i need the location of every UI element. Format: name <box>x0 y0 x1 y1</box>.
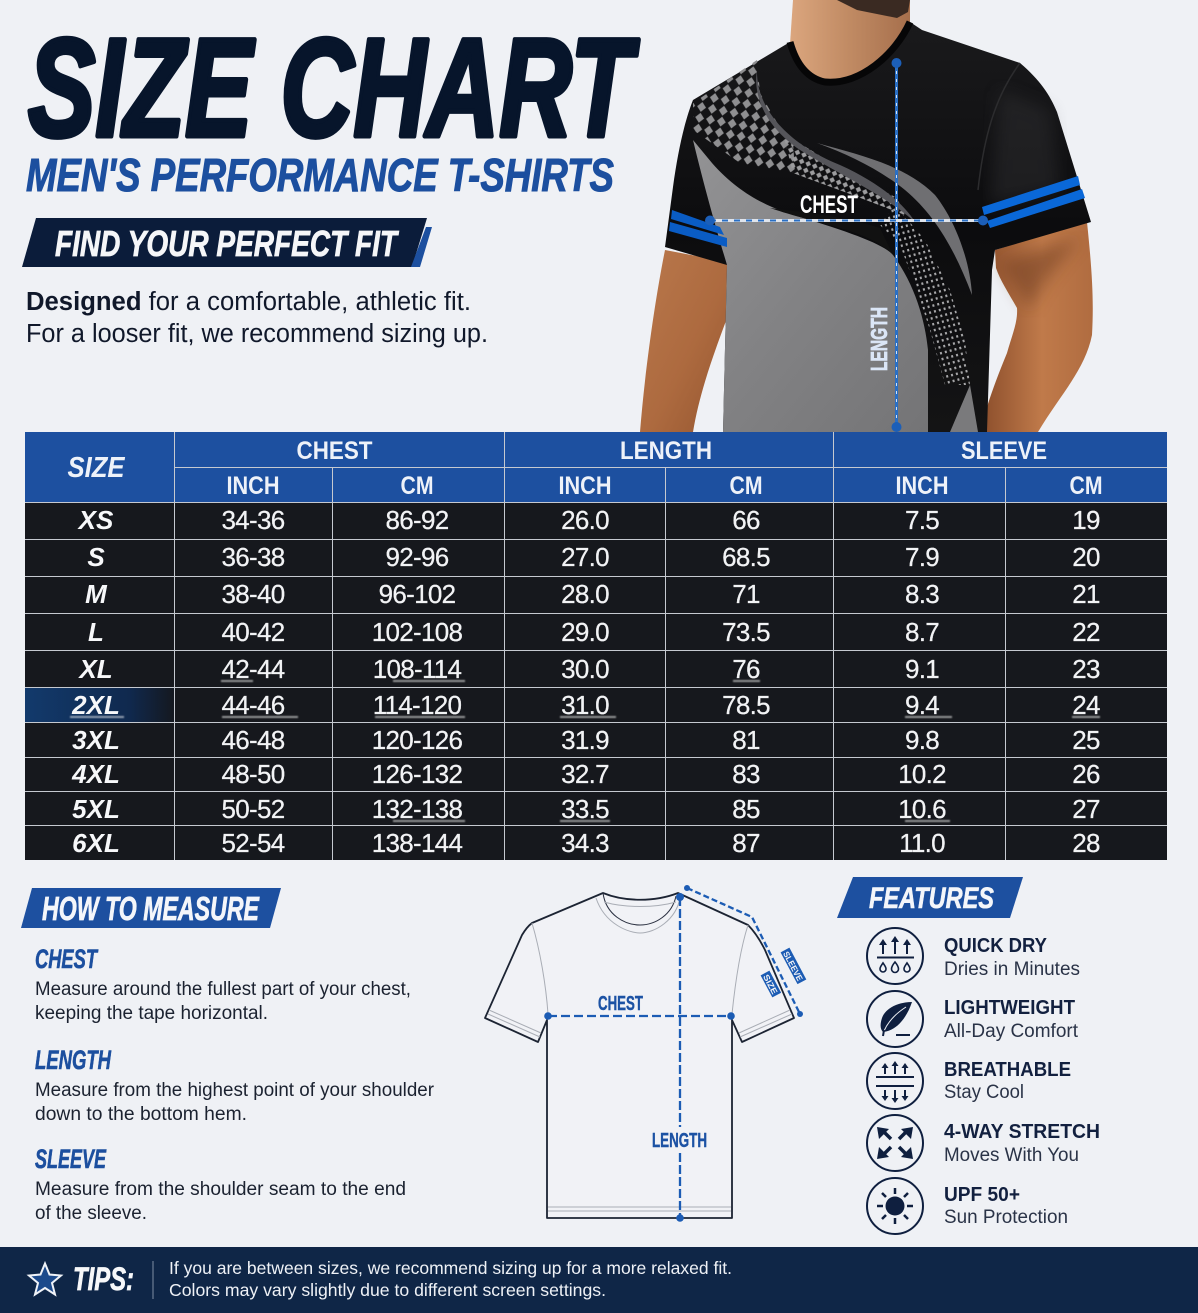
row 2XL: 78.5 <box>722 690 770 720</box>
length line <box>679 897 681 1218</box>
feature: 4-way stretch <box>867 1115 1100 1171</box>
how to measure: sleeve: SLEEVE <box>35 1144 107 1174</box>
right sleeve stripes <box>982 176 1085 228</box>
row M <box>85 579 1100 609</box>
row M: 71 <box>732 579 760 609</box>
tips text <box>169 1258 732 1300</box>
row S <box>87 542 1100 572</box>
row XL: XL <box>77 654 113 684</box>
row 3XL: 3XL <box>72 725 120 755</box>
how to measure: chest: CHEST <box>35 944 99 974</box>
halftone lower band <box>880 205 970 385</box>
row 3XL: 31.9 <box>561 725 609 755</box>
title: SIZE CHART <box>28 9 640 166</box>
row 2XL: 114-120 <box>373 690 462 720</box>
unit headers: CM <box>1070 472 1102 500</box>
t-shirt measuring diagram <box>485 885 806 1222</box>
row 4XL: 48-50 <box>222 759 285 789</box>
shirt body <box>665 22 1091 432</box>
row L: 29.0 <box>561 617 609 647</box>
row 2XL: 44-46 <box>222 690 285 720</box>
size table <box>25 432 1167 860</box>
row M: 28.0 <box>561 579 609 609</box>
row L: 102-108 <box>372 617 462 647</box>
unit headers <box>226 472 1102 500</box>
row S: 7.9 <box>905 542 939 572</box>
chest label: CHEST <box>598 993 643 1015</box>
how to measure: length <box>35 1045 435 1125</box>
small label <box>760 971 781 998</box>
row XS: 66 <box>732 505 760 535</box>
row 4XL: 126-132 <box>372 759 462 789</box>
right sleeve highlight <box>990 90 1060 205</box>
feature: upf 50+: UPF 50+ <box>944 1183 1020 1206</box>
left arm <box>640 250 732 432</box>
feature: breathable <box>867 1053 1071 1109</box>
feature: lightweight: All-Day Comfort <box>944 1021 1079 1042</box>
row S: 36-38 <box>222 542 285 572</box>
row S: 68.5 <box>722 542 770 572</box>
intro text: Designed for a comfortable, athletic fit. <box>26 288 471 316</box>
unit headers: INCH <box>558 472 612 500</box>
row 6XL <box>72 828 1100 858</box>
grey front panel <box>693 140 928 432</box>
column group headers: SLEEVE <box>961 437 1047 465</box>
row 2XL: 31.0 <box>561 690 609 720</box>
icon: arrows and drops <box>867 928 923 984</box>
row 6XL: 52-54 <box>222 828 285 858</box>
row 5XL <box>72 794 1100 824</box>
row M: 38-40 <box>222 579 285 609</box>
banner: how to measure: HOW TO MEASURE <box>42 890 260 927</box>
intro text <box>26 288 488 348</box>
row 2XL: 9.4 <box>905 690 939 720</box>
row 5XL: 85 <box>732 794 760 824</box>
row 3XL: 25 <box>1072 725 1100 755</box>
length label: LENGTH <box>652 1130 707 1152</box>
black swoosh over grey <box>770 208 893 255</box>
tips label: TIPS: <box>73 1261 134 1297</box>
column group headers <box>68 437 1047 484</box>
row 6XL: 138-144 <box>372 828 462 858</box>
column group headers: LENGTH <box>620 437 712 465</box>
unit headers: CM <box>730 472 762 500</box>
subtitle: MEN'S PERFORMANCE T-SHIRTS <box>26 149 614 201</box>
feature: lightweight: LIGHTWEIGHT <box>944 996 1075 1019</box>
row 4XL: 32.7 <box>561 759 609 789</box>
row 4XL: 83 <box>732 759 760 789</box>
sleeve line <box>687 888 800 1014</box>
banner: how to measure <box>21 888 281 928</box>
row 5XL: 10.6 <box>898 794 946 824</box>
table header <box>25 432 1167 502</box>
unit headers: INCH <box>896 472 948 500</box>
neck <box>790 0 910 84</box>
row XS: 7.5 <box>905 505 939 535</box>
unit headers: CM <box>400 472 434 500</box>
feature: breathable: Stay Cool <box>944 1082 1024 1103</box>
intro text: For a looser fit, we recommend sizing up. <box>26 320 488 348</box>
feature: quick dry <box>867 928 1080 984</box>
column group headers: SIZE <box>68 452 126 484</box>
row 2XL: 24 <box>1072 690 1100 720</box>
row 3XL <box>72 725 1100 755</box>
chin shadow <box>837 0 910 18</box>
table body <box>25 502 1167 860</box>
feature: quick dry: Dries in Minutes <box>944 959 1080 980</box>
icon: feather <box>867 991 923 1047</box>
row 4XL <box>71 759 1100 789</box>
tips text: Colors may vary slightly due to different screen settings. <box>169 1280 606 1300</box>
feature: 4-way stretch: Moves With You <box>944 1145 1079 1166</box>
right arm <box>980 222 1093 432</box>
icon: star <box>29 1264 61 1294</box>
how to measure: sleeve: of the sleeve. <box>35 1203 147 1224</box>
feature: upf 50+: Sun Protection <box>944 1207 1068 1228</box>
length label: LENGTH <box>866 307 892 371</box>
row 5XL: 27 <box>1072 794 1100 824</box>
banner: find your perfect fit: FIND YOUR PERFECT FIT <box>55 223 399 264</box>
row S: 27.0 <box>561 542 609 572</box>
row XL <box>77 654 1100 684</box>
icon: four arrows <box>867 1115 923 1171</box>
how to measure: length: down to the bottom hem. <box>35 1104 247 1125</box>
chest label: CHEST <box>800 191 858 219</box>
banner: find your perfect fit <box>22 218 432 267</box>
shirt outline <box>485 893 794 1218</box>
row L: L <box>88 617 104 647</box>
row 6XL: 11.0 <box>899 828 945 858</box>
how to measure: chest <box>35 944 411 1024</box>
shirt details <box>488 893 792 1211</box>
row 4XL: 10.2 <box>898 759 946 789</box>
column group headers: CHEST <box>296 437 372 465</box>
halftone small <box>783 133 905 215</box>
light swoosh <box>817 143 972 295</box>
feature: breathable: BREATHABLE <box>944 1058 1071 1081</box>
how to measure: chest: keeping the tape horizontal. <box>35 1003 268 1024</box>
feature: upf 50+ <box>867 1178 1068 1234</box>
how to measure: chest: Measure around the fullest part of your chest, <box>35 979 411 1000</box>
row 3XL: 120-126 <box>372 725 462 755</box>
row M: 8.3 <box>905 579 939 609</box>
arm shading <box>1000 238 1080 310</box>
shoulder seam right <box>978 63 1020 190</box>
row XS: XS <box>77 505 114 535</box>
grey swoosh <box>756 70 915 222</box>
collar <box>790 22 910 82</box>
row 6XL: 87 <box>732 828 760 858</box>
row 2XL <box>71 690 1100 720</box>
feature: lightweight <box>867 991 1079 1047</box>
how to measure: length: Measure from the highest point of your shoulder <box>35 1080 435 1101</box>
row 5XL: 33.5 <box>561 794 609 824</box>
row 5XL: 50-52 <box>222 794 285 824</box>
length measure line <box>895 63 898 428</box>
sleeve label: SLEEVE <box>781 950 805 983</box>
icon: fabric with arrows <box>867 1053 923 1109</box>
banner: features <box>837 877 1023 918</box>
grid lines <box>25 432 1167 860</box>
row XL: 23 <box>1072 654 1100 684</box>
row 4XL: 26 <box>1072 759 1100 789</box>
banner: features: FEATURES <box>869 882 994 915</box>
row 6XL: 28 <box>1072 828 1100 858</box>
how to measure: sleeve: Measure from the shoulder seam to the end <box>35 1179 406 1200</box>
row L: 40-42 <box>222 617 285 647</box>
chest line <box>548 1015 731 1017</box>
photo: model wearing t-shirt <box>640 0 1093 432</box>
row M: 96-102 <box>379 579 456 609</box>
feature: 4-way stretch: 4-WAY STRETCH <box>944 1120 1100 1143</box>
row S: 92-96 <box>386 542 449 572</box>
row L: 8.7 <box>905 617 939 647</box>
row XS <box>77 505 1100 535</box>
row 2XL: 2XL <box>71 690 120 720</box>
row XL: 9.1 <box>905 654 939 684</box>
row 5XL: 132-138 <box>372 794 462 824</box>
row 3XL: 81 <box>732 725 760 755</box>
row M: 21 <box>1072 579 1100 609</box>
row XL: 108-114 <box>373 654 462 684</box>
row XS: 26.0 <box>561 505 609 535</box>
chest measure line <box>710 219 983 222</box>
feature: quick dry: QUICK DRY <box>944 934 1047 957</box>
tips text: If you are between sizes, we recommend sizing up for a more relaxed fit. <box>169 1258 732 1278</box>
halftone large <box>693 60 795 173</box>
footer tips bar <box>0 1247 1198 1313</box>
how to measure: length: LENGTH <box>35 1045 111 1075</box>
highlighted size cell <box>25 688 174 722</box>
row 4XL: 4XL <box>71 759 120 789</box>
row XL: 76 <box>732 654 760 684</box>
row L <box>88 617 1100 647</box>
row 3XL: 9.8 <box>905 725 939 755</box>
row XS: 86-92 <box>386 505 449 535</box>
row XL: 42-44 <box>222 654 285 684</box>
icon: sun <box>867 1178 923 1234</box>
row 6XL: 6XL <box>72 828 120 858</box>
row 6XL: 34.3 <box>561 828 609 858</box>
row XL: 30.0 <box>561 654 609 684</box>
row 3XL: 46-48 <box>222 725 285 755</box>
row L: 73.5 <box>722 617 770 647</box>
row XS: 19 <box>1072 505 1100 535</box>
row S: 20 <box>1072 542 1100 572</box>
how to measure: sleeve <box>35 1144 406 1224</box>
row M: M <box>85 579 108 609</box>
left sleeve stripes <box>669 210 727 247</box>
small label: SIZE <box>761 973 780 996</box>
unit headers: INCH <box>226 472 280 500</box>
row XS: 34-36 <box>222 505 285 535</box>
row L: 22 <box>1072 617 1100 647</box>
row S: S <box>87 542 105 572</box>
row 5XL: 5XL <box>72 794 120 824</box>
